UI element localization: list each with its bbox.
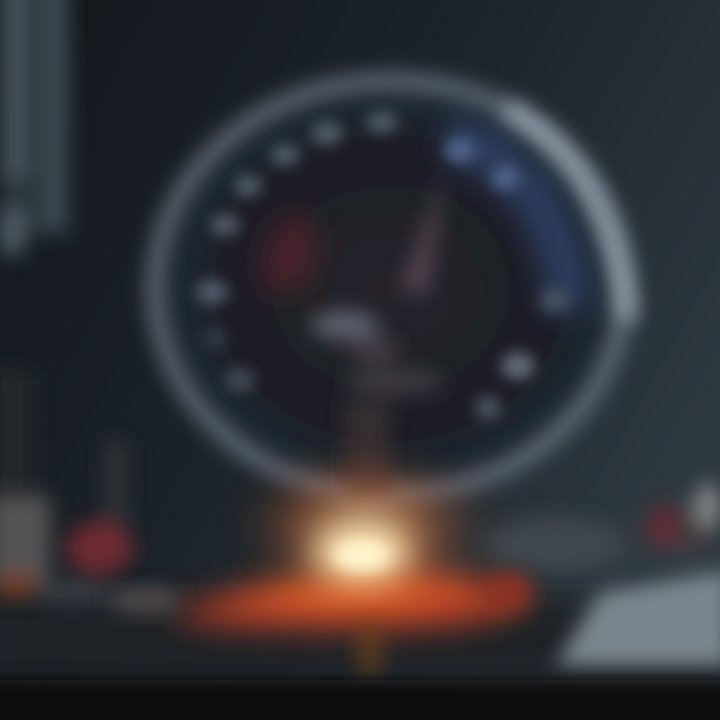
needle: [400, 170, 445, 295]
grey rim left: [107, 586, 183, 614]
gauge: [155, 81, 628, 500]
red rim right: [484, 574, 532, 610]
flame stem: [356, 618, 384, 682]
core highlight: [336, 541, 388, 569]
left vertical glass tube: [0, 0, 70, 500]
blue dial highlight: [450, 135, 570, 310]
core glow: [314, 525, 410, 581]
dark bottom band: [0, 680, 720, 720]
central dial marks: [311, 311, 445, 500]
right paper and objects: [483, 483, 720, 666]
outer glow: [235, 450, 495, 610]
bright ring highlight: [505, 108, 628, 320]
table surface: [0, 600, 720, 680]
gauge face: [164, 90, 616, 486]
gauge outer ring: [155, 81, 625, 495]
glowing flame: [107, 450, 532, 682]
red dial zone: [254, 208, 326, 302]
left red objects: [0, 440, 134, 604]
flame base: [165, 560, 530, 632]
dial tick marks: [196, 111, 570, 420]
